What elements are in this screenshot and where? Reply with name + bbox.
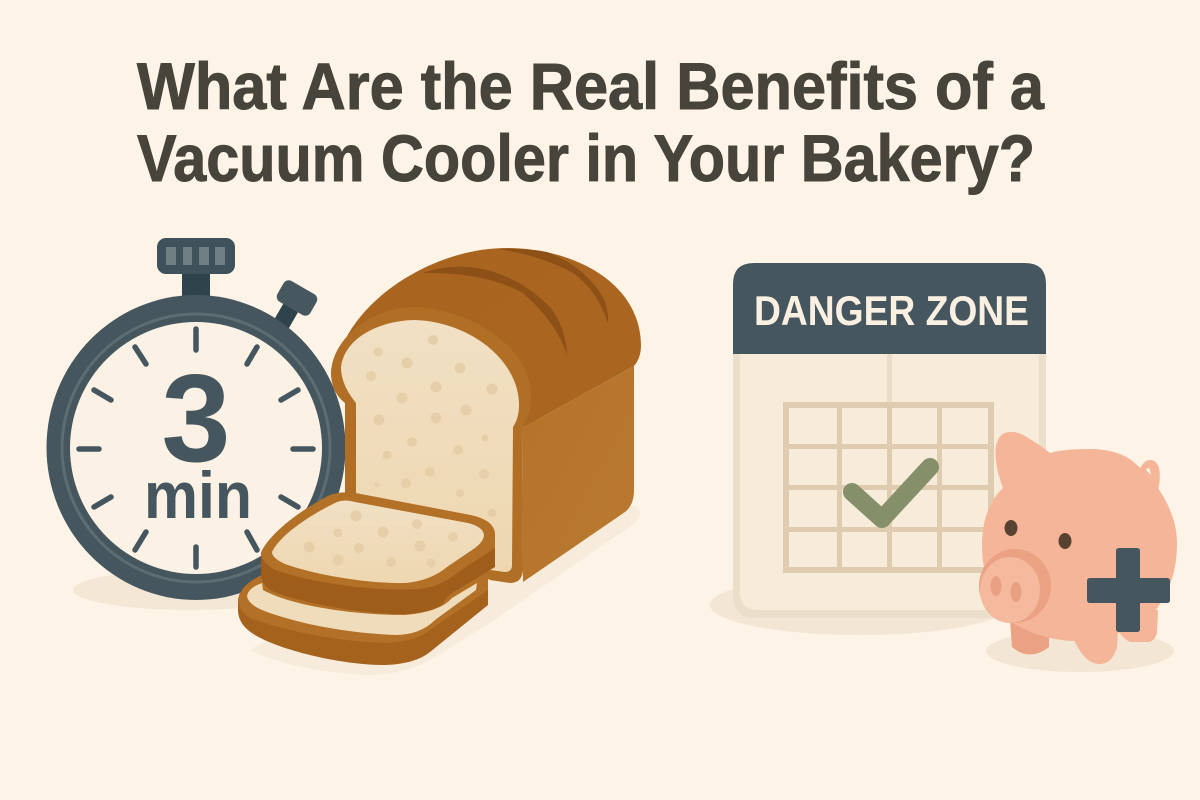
title: What Are the Real Benefits of a xyxy=(137,49,1045,123)
icon: check mark xyxy=(852,467,930,519)
icon: stopwatch showing 3 min: min xyxy=(144,458,252,532)
title xyxy=(137,49,1045,195)
icon: danger zone calendar xyxy=(710,263,1046,635)
icon: piggy bank with plus xyxy=(979,432,1177,672)
title: Vacuum Cooler in Your Bakery? xyxy=(137,121,1035,195)
icon: stopwatch showing 3 min xyxy=(46,238,346,610)
icon: plus sign xyxy=(1087,548,1170,632)
calendar heading: DANGER ZONE xyxy=(754,287,1029,334)
icon: bread slices xyxy=(238,492,495,665)
calendar grid xyxy=(786,405,991,570)
icon: stopwatch showing 3 min: 3 xyxy=(162,350,230,488)
icon: bread loaf xyxy=(250,248,641,675)
